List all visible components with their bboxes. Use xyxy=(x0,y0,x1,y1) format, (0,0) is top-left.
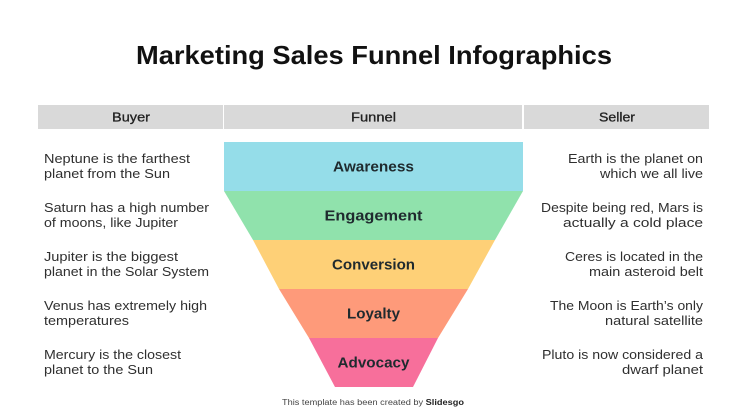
funnel stage: awareness xyxy=(224,142,523,191)
seller text: mars xyxy=(541,200,704,230)
funnel stage: advocacy: Advocacy xyxy=(338,354,410,372)
seller text: ceres: Ceres is located in the xyxy=(565,249,703,264)
seller text: moon xyxy=(550,298,704,328)
buyer text: jupiter xyxy=(44,249,209,279)
funnel stage: loyalty: Loyalty xyxy=(347,306,401,322)
seller text: ceres: main asteroid belt xyxy=(589,264,703,279)
funnel stage: conversion: Conversion xyxy=(332,256,415,274)
table header row xyxy=(38,105,709,129)
seller column xyxy=(541,151,704,377)
buyer text: neptune: planet from the Sun xyxy=(44,166,170,181)
seller text: mars: Despite being red, Mars is xyxy=(541,200,704,215)
buyer text: venus: temperatures xyxy=(44,313,130,328)
title: Marketing Sales Funnel Infographics xyxy=(136,40,612,70)
seller text: moon: The Moon is Earth’s only xyxy=(550,298,704,313)
header: funnel: Funnel xyxy=(351,110,396,124)
buyer text: saturn: Saturn has a high number xyxy=(44,200,210,215)
buyer text: jupiter: planet in the Solar System xyxy=(44,264,209,279)
funnel stage: engagement: Engagement xyxy=(324,208,423,224)
header: seller: Seller xyxy=(599,110,635,124)
buyer column xyxy=(44,151,210,377)
seller text: pluto: Pluto is now considered a xyxy=(542,347,704,362)
header: seller xyxy=(524,105,709,129)
funnel stage: loyalty xyxy=(279,289,468,338)
funnel xyxy=(224,142,523,387)
seller text: earth xyxy=(568,151,703,181)
seller text: ceres xyxy=(565,249,703,279)
buyer text: jupiter: Jupiter is the biggest xyxy=(44,249,178,264)
seller text: mars: actually a cold place xyxy=(563,215,703,230)
buyer text: saturn: of moons, like Jupiter xyxy=(44,215,179,230)
buyer text: venus xyxy=(44,298,207,328)
credit line: This template has been created by Slidesgo xyxy=(282,398,464,407)
funnel stage: awareness: Awareness xyxy=(333,158,414,176)
buyer text: neptune xyxy=(44,151,190,181)
funnel stage: conversion xyxy=(253,240,495,289)
funnel stage: engagement xyxy=(224,191,523,240)
seller text: moon: natural satellite xyxy=(605,313,703,328)
funnel stage: advocacy xyxy=(309,338,438,387)
seller text: pluto: dwarf planet xyxy=(622,362,703,377)
buyer text: mercury xyxy=(44,347,181,377)
seller text: earth: which we all live xyxy=(599,166,703,181)
buyer text: saturn xyxy=(44,200,210,230)
buyer text: venus: Venus has extremely high xyxy=(44,298,207,313)
seller text: pluto xyxy=(542,347,704,377)
buyer text: neptune: Neptune is the farthest xyxy=(44,151,190,166)
header: buyer xyxy=(38,105,223,129)
buyer text: mercury: planet to the Sun xyxy=(44,362,153,377)
header: funnel xyxy=(224,105,522,129)
header: buyer: Buyer xyxy=(112,110,150,124)
seller text: earth: Earth is the planet on xyxy=(568,151,703,166)
buyer text: mercury: Mercury is the closest xyxy=(44,347,181,362)
